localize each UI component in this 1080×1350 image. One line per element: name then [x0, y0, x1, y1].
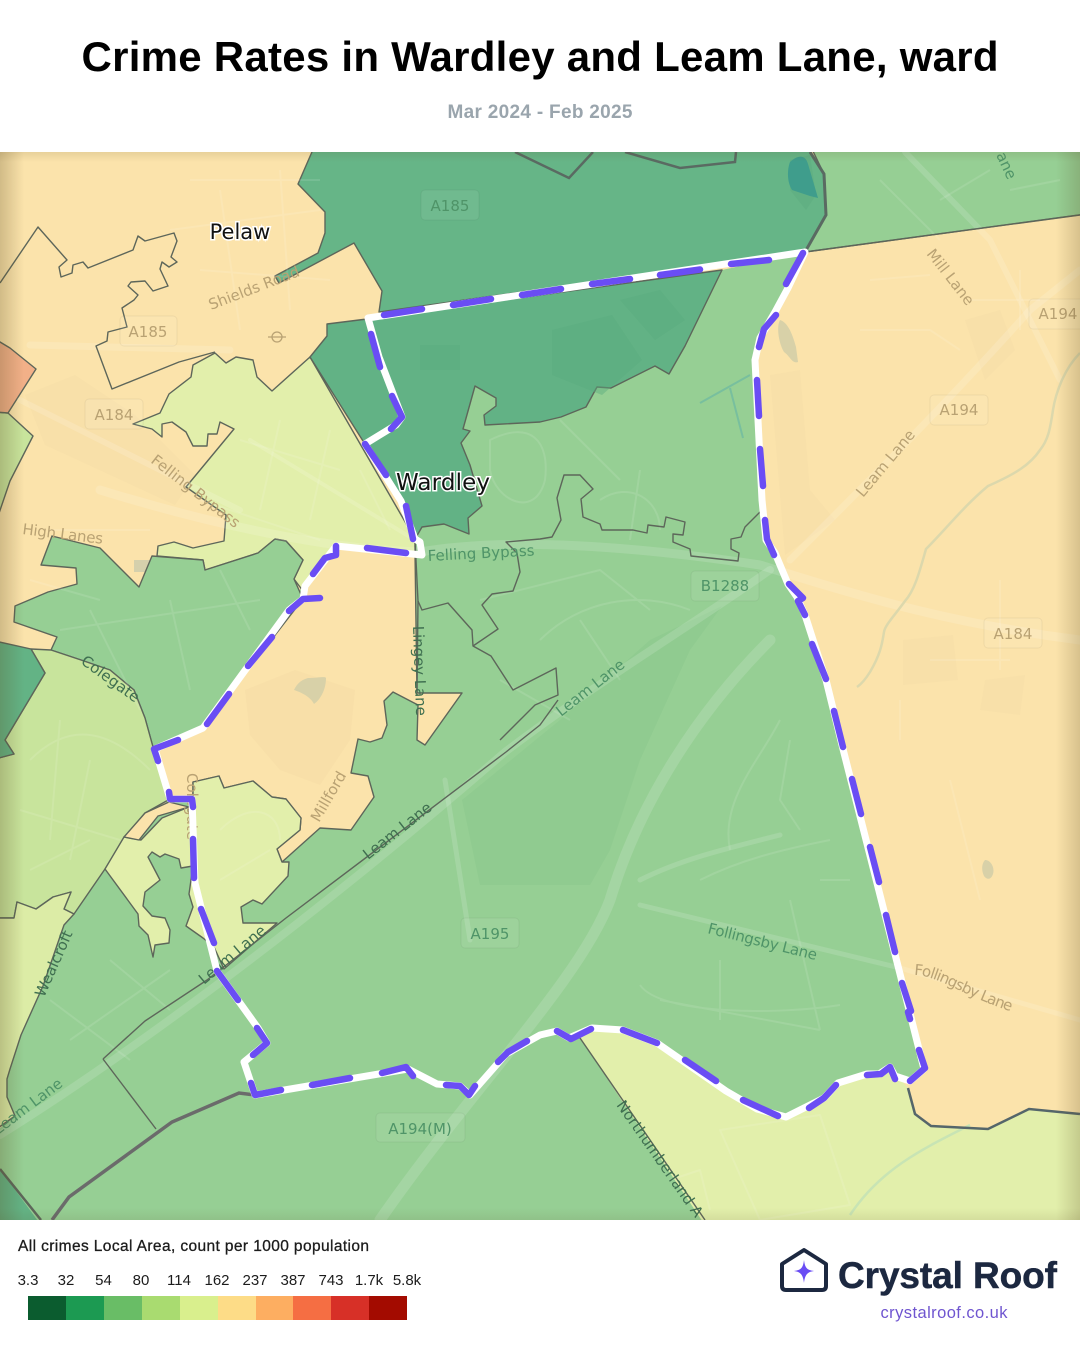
shield: A194(M) — [376, 1113, 465, 1142]
label: Felling Bypass east: Felling Bypass — [427, 541, 535, 565]
stream: east side — [857, 353, 1080, 687]
ward outline: white casing — [155, 252, 924, 1117]
legend scale labels: 237 — [242, 1272, 268, 1289]
label: Millford: Millford — [307, 768, 350, 825]
label: Colegate south: Colegate — [183, 773, 201, 840]
shield: A184 east: A184 — [994, 625, 1032, 643]
label: top-right road fragment: ane — [992, 149, 1020, 182]
label: Shields Road: Shields Road — [206, 263, 302, 314]
logo: house icon — [782, 1250, 826, 1290]
label: Lingey Lane: Lingey Lane — [409, 626, 430, 716]
legend colour scale — [28, 1296, 407, 1320]
legend scale labels: 3.3 — [18, 1272, 38, 1289]
shield: A194 centre: A194 — [940, 401, 978, 419]
legend scale labels: 32 — [58, 1272, 74, 1289]
choropleth map — [0, 152, 1080, 1220]
logo: website url: crystalroof.co.uk — [880, 1304, 1008, 1322]
label: Felling Bypass west: Felling Bypass — [148, 451, 244, 532]
area: central beige tract — [155, 546, 462, 862]
stream: south-east — [850, 1125, 970, 1215]
legend title: All crimes Local Area, count per 1000 population — [18, 1238, 369, 1255]
shield: B1288: B1288 — [701, 577, 749, 595]
shield: A185 Pelaw: A185 — [129, 323, 167, 341]
legend scale labels: 80 — [133, 1272, 149, 1289]
shield: A195: A195 — [471, 925, 509, 943]
ward boundaries: thin internal lines — [103, 215, 1080, 1220]
area: Wardley dark green — [310, 270, 722, 539]
label: High Lanes: High Lanes — [22, 520, 104, 548]
label: Colegate: Colegate — [78, 652, 143, 706]
shield: A185 north — [421, 190, 479, 220]
legend scale labels: 1.7k — [355, 1272, 384, 1289]
map vignette — [0, 152, 1080, 1220]
boundary: top of map — [515, 152, 736, 178]
area: darker farmland patch — [462, 606, 722, 885]
station symbol — [268, 332, 286, 342]
label: Follingsby Lane inside ward: Follingsby Lane — [706, 919, 819, 964]
legend scale labels: 387 — [280, 1272, 306, 1289]
ward outline: Wardley and Leam Lane — [154, 252, 925, 1117]
shield: A184 east — [984, 618, 1042, 648]
shield: A184 west: A184 — [95, 406, 133, 424]
shield: A194(M): A194(M) — [388, 1120, 452, 1138]
label: Mill Lane: Mill Lane — [923, 245, 978, 309]
main roads — [0, 152, 1080, 1220]
legend scale labels — [18, 1272, 422, 1289]
shield: B1288 — [691, 571, 759, 601]
area: north-west light green sliver — [0, 412, 33, 525]
area: south-west yellow-green — [0, 892, 74, 1130]
area: south-east yellow-green — [580, 1028, 1080, 1225]
shield: A194 north-east — [1029, 299, 1080, 329]
title: Crime Rates in Wardley and Leam Lane, ward — [82, 33, 998, 80]
boundary: thick grey south — [52, 1093, 255, 1220]
area: north-east mid-green — [805, 145, 1080, 252]
label: Leam Lane east: Leam Lane — [852, 426, 919, 501]
area: Colegate mid-green — [14, 536, 303, 747]
pond: teal water — [788, 157, 818, 198]
residential street network — [20, 170, 1060, 1220]
area: darker woodland patches — [594, 386, 611, 395]
legend scale labels: 5.8k — [393, 1272, 422, 1289]
area: central and southern mid-green — [0, 252, 924, 1225]
road labels — [0, 153, 1080, 1218]
place label: Pelaw: Pelaw — [210, 220, 270, 244]
beige darker land patches — [25, 310, 1025, 715]
pond: grey ponds on beige — [294, 320, 994, 879]
logo: violet star — [794, 1260, 814, 1283]
logo: wordmark: Crystal Roof — [838, 1255, 1058, 1296]
beige patch inside central tract — [245, 670, 355, 785]
area: west dark green corner — [0, 641, 45, 759]
area: north dark green — [275, 145, 826, 312]
boundary: Pelaw outline — [0, 227, 215, 389]
place label: Wardley: Wardley — [396, 470, 490, 496]
label: Leam Lane central: Leam Lane — [552, 655, 628, 720]
drain: teal in green — [700, 375, 750, 438]
label: Leam Lane on boundary: Leam Lane — [359, 798, 435, 863]
legend scale labels: 743 — [318, 1272, 344, 1289]
label: Northumberland road: Northumberland A — [613, 1097, 707, 1221]
shield: A194 centre — [930, 395, 988, 425]
shield: A195 — [461, 918, 519, 948]
boundary: river on south-east — [908, 1088, 1080, 1129]
area: west light green — [0, 649, 170, 918]
label: Leam Lane lower: Leam Lane — [195, 921, 270, 988]
area: Felling Bypass yellow-green — [133, 353, 415, 591]
area: beige sliver — [124, 802, 189, 840]
shield: A185 Pelaw — [120, 316, 177, 346]
ward outline: violet dashes — [154, 253, 925, 1116]
legend scale labels: 162 — [204, 1272, 230, 1289]
legend scale labels: 114 — [167, 1272, 191, 1289]
label: Follingsby Lane east: Follingsby Lane — [916, 964, 1012, 1010]
shield: A194 north-east: A194 — [1039, 305, 1077, 323]
subtitle: date range: Mar 2024 - Feb 2025 — [448, 102, 633, 123]
legend scale labels: 54 — [95, 1272, 112, 1289]
boundary: north-eastern river — [805, 152, 826, 252]
area: Colegate yellow-green west — [105, 807, 193, 957]
shield: A185 north: A185 — [431, 197, 469, 215]
shield: A184 west — [85, 399, 143, 429]
area: bottom-left dark green corner — [0, 1171, 38, 1220]
area: Colegate yellow-green east — [186, 776, 301, 969]
label: Wealcroft: Wealcroft — [31, 928, 76, 1000]
area: orange high-crime tract — [0, 339, 36, 413]
grey land patch — [134, 560, 151, 572]
boundary: thick grey bottom-left corner — [0, 1169, 41, 1220]
